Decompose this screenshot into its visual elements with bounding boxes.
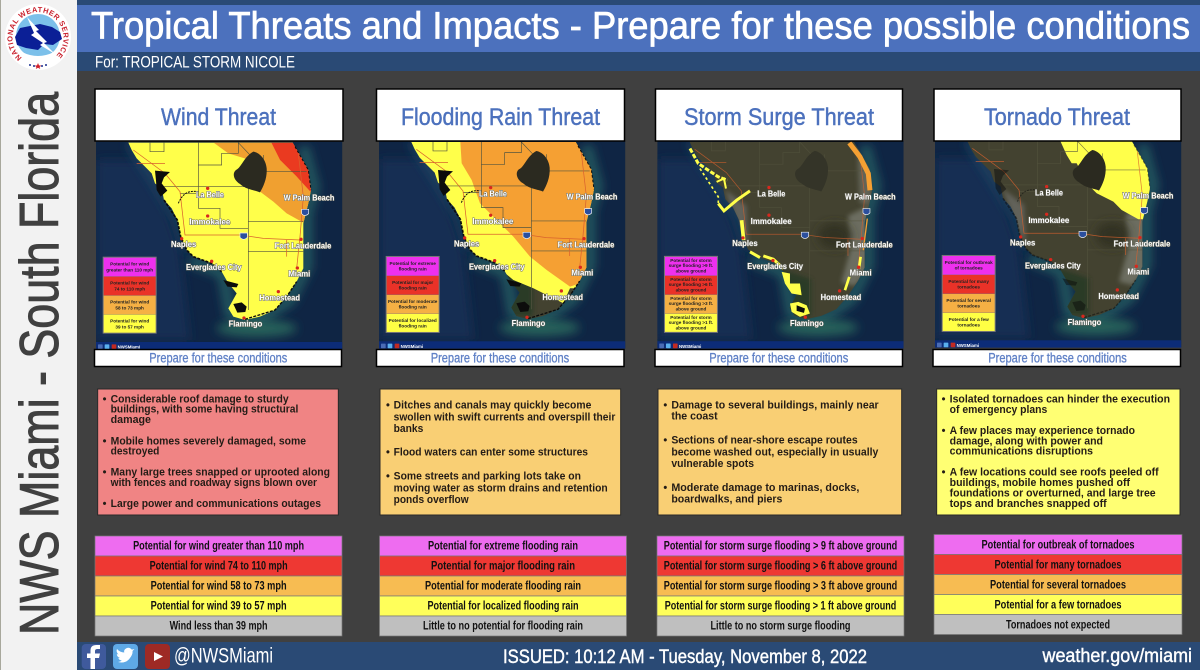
text block: flooding impacts: • <box>386 471 390 483</box>
map labels: Immokalee <box>472 216 514 226</box>
map legend: flooding rain <box>399 267 427 272</box>
map labels <box>454 189 617 328</box>
map legend: Potential for major <box>392 280 433 285</box>
map legend: surge flooding >9 ft. <box>669 263 713 268</box>
map labels: Fort Lauderdale <box>275 240 331 250</box>
map legend: Potential for a few <box>949 317 989 322</box>
legend: storm surge threat levels: Potential for storm surge flooding > 9 ft above ground <box>664 540 897 552</box>
map labels: Homestead <box>259 293 300 303</box>
map footer bar <box>657 341 904 349</box>
legend: storm surge threat levels: Little to no storm surge flooding <box>710 620 850 632</box>
legend: wind threat levels: Potential for wind 39 to 57 mph <box>151 600 287 612</box>
map labels: Homestead <box>821 292 861 302</box>
map legend: tornadoes <box>957 285 980 290</box>
subheading: flooding prepare <box>376 350 624 366</box>
text block: wind impacts: • <box>103 498 107 510</box>
legend: wind threat levels: Potential for wind 58 to 73 mph <box>151 580 287 592</box>
map legend: above ground <box>676 288 707 293</box>
map labels <box>171 189 334 329</box>
map legend: Potential for storm <box>670 258 712 263</box>
text block: wind impacts: Considerable roof damage to sturdy <box>111 394 289 406</box>
heading: Wind Threat <box>95 89 343 141</box>
text block: tornado impacts: A few locations could see roofs peeled off <box>950 467 1159 479</box>
legend: tornado threat levels: Potential for outbreak of tornadoes <box>982 540 1134 552</box>
legend: storm surge threat levels: Potential for storm surge flooding > 1 ft above ground <box>665 600 896 612</box>
map legend: of tornadoes <box>955 266 983 271</box>
text block: flooding impacts: • <box>386 447 390 459</box>
panel: tornado map <box>935 137 1181 348</box>
legend: flooding threat levels: Potential for extreme flooding rain <box>428 540 578 552</box>
text block: tornado impacts: communications disruptions <box>950 446 1093 458</box>
text block: wind impacts: with fences and roadway signs blown over <box>110 477 318 489</box>
heading: Wind Threat: Wind Threat <box>161 104 276 131</box>
text block: wind impacts: • <box>103 394 107 406</box>
legend: tornado threat levels: Tornadoes not expected <box>1006 620 1110 632</box>
legend: tornado threat levels: Potential for many tornadoes <box>994 560 1122 572</box>
legend: flooding threat levels: Potential for moderate flooding rain <box>425 580 581 592</box>
map labels: W Palm Beach <box>845 192 896 202</box>
website: weather.gov/miami <box>1042 646 1192 667</box>
map legend <box>942 255 996 332</box>
map labels: Flamingo <box>512 318 545 328</box>
map legend <box>103 257 157 334</box>
map footer bar <box>379 341 625 349</box>
text block: surge impacts: Moderate damage to marinas, docks, <box>671 482 859 494</box>
text block: tornado impacts: buildings, mobile homes pushed off <box>950 477 1130 489</box>
legend: flooding threat levels: Potential for localized flooding rain <box>428 600 578 612</box>
text block: surge impacts: Damage to several buildings, mainly near <box>671 399 879 411</box>
text block: tornado impacts: • <box>942 467 946 479</box>
map labels: Miami <box>1127 267 1149 277</box>
map legend: flooding rain <box>399 305 427 310</box>
map legend: surge flooding >3 ft. <box>669 301 713 306</box>
map footer bar: NWSMiami <box>118 345 140 350</box>
map legend: greater than 110 mph <box>106 267 153 272</box>
map labels: Everglades City <box>469 261 525 271</box>
text block: surge impacts: vulnerable spots <box>671 458 754 470</box>
map legend: above ground <box>676 326 707 331</box>
social handle: @NWSMiami <box>174 645 273 668</box>
text block: flooding impacts <box>380 389 621 515</box>
map legend: above ground <box>676 269 707 274</box>
subheading: flooding prepare: Prepare for these conditions <box>431 350 569 366</box>
map legend: Potential for wind <box>110 319 149 324</box>
legend: tornado threat levels: Potential for several tornadoes <box>990 580 1126 592</box>
legend: wind threat levels: Potential for wind 74 to 110 mph <box>150 560 288 572</box>
map labels: Miami <box>850 268 872 278</box>
text block: wind impacts: Mobile homes severely damaged, some <box>111 435 306 447</box>
subheading: surge prepare <box>655 350 902 366</box>
map labels: W Palm Beach <box>1123 191 1173 201</box>
map labels: Everglades City <box>1025 260 1081 270</box>
surge zones <box>690 143 870 317</box>
map labels: Homestead <box>542 292 583 302</box>
text block: wind impacts <box>98 389 338 515</box>
map labels <box>732 189 896 328</box>
map labels: Everglades City <box>747 261 803 271</box>
text block: flooding impacts: moving water as storm drains and retention <box>394 482 608 494</box>
panel: flooding rain map <box>379 137 625 349</box>
map labels: Immokalee <box>189 217 231 227</box>
map labels: Fort Lauderdale <box>558 240 614 250</box>
panel: wind map <box>96 140 342 350</box>
text block: tornado impacts: damage, along with power and <box>950 435 1103 447</box>
map legend: surge flooding >6 ft. <box>669 282 713 287</box>
text block: flooding impacts: swollen with swift currents and overspill their <box>394 411 616 423</box>
subheading: tornado prepare: Prepare for these conditions <box>988 350 1127 366</box>
map legend: flooding rain <box>399 286 427 291</box>
map legend: Potential for extreme <box>390 261 436 266</box>
icon: National Weather Service logo: NATIONAL WEATHER SERVICE <box>7 6 69 61</box>
text block: tornado impacts: • <box>942 394 946 406</box>
text block: tornado impacts: tops and branches snapped off <box>950 498 1107 510</box>
text block: surge impacts: boardwalks, and piers <box>671 494 782 506</box>
text block: wind impacts: Many large trees snapped or uprooted along <box>111 467 330 479</box>
text block: surge impacts <box>658 389 902 515</box>
map footer bar: NWSMiami <box>401 344 423 349</box>
map legend: 58 to 73 mph <box>115 305 144 310</box>
map legend: Potential for storm <box>670 296 712 301</box>
left sidebar <box>0 0 77 670</box>
legend: wind threat levels: Potential for wind greater than 110 mph <box>133 540 304 552</box>
heading: Tornado Threat: Tornado Threat <box>984 104 1130 131</box>
text block: flooding impacts: Ditches and canals may quickly become <box>394 400 591 412</box>
text block: surge impacts: the coast <box>671 411 718 423</box>
text block: tornado impacts: of emergency plans <box>950 404 1047 416</box>
text block: flooding impacts: Flood waters can enter some structures <box>394 447 588 459</box>
icon: twitter <box>113 644 138 669</box>
legend: storm surge threat levels <box>657 536 904 636</box>
text block: surge impacts: • <box>663 482 667 494</box>
text block: wind impacts: buildings, with some having structural <box>111 404 298 416</box>
subheading: wind prepare <box>94 350 342 366</box>
text block: flooding impacts: banks <box>394 423 423 435</box>
legend: storm surge threat levels: Potential for storm surge flooding > 6 ft above ground <box>664 560 897 572</box>
panel: storm surge map <box>657 141 904 349</box>
map legend <box>386 256 440 333</box>
text block: surge impacts: become washed out, especially in usually <box>671 446 879 458</box>
map legend <box>664 256 718 333</box>
map labels: W Palm Beach <box>284 192 334 202</box>
map labels: La Belle <box>757 189 785 199</box>
subheading: wind prepare: Prepare for these conditions <box>149 350 287 366</box>
map legend: Potential for wind <box>110 262 149 267</box>
text block: wind impacts: damage <box>111 414 151 426</box>
map labels: Immokalee <box>751 216 792 226</box>
map footer bar <box>96 342 342 350</box>
heading: Flooding Rain Threat <box>376 89 624 141</box>
map legend: surge flooding >1 ft. <box>669 320 713 325</box>
subheading: surge prepare: Prepare for these conditions <box>709 350 848 366</box>
map legend: 39 to 57 mph <box>115 324 144 329</box>
header banner <box>77 0 1200 72</box>
heading: Flooding Rain Threat: Flooding Rain Threat <box>401 104 600 131</box>
legend: flooding threat levels <box>380 536 626 636</box>
text block: wind impacts: • <box>103 435 107 447</box>
text block: tornado impacts: foundations or overturned, and large tree <box>950 488 1156 500</box>
heading: Storm Surge Threat: Storm Surge Threat <box>684 104 874 131</box>
text block: tornado impacts: A few places may experience tornado <box>950 425 1135 437</box>
footer bar <box>77 642 1200 670</box>
text block: flooding impacts: • <box>386 400 390 412</box>
map legend: Potential for many <box>948 279 989 284</box>
text block: wind impacts: Large power and communications outages <box>111 498 321 510</box>
text block: surge impacts: • <box>663 399 667 411</box>
map labels: Naples <box>732 238 758 248</box>
map footer bar: NWSMiami <box>679 344 701 349</box>
map labels: Flamingo <box>229 319 262 329</box>
map labels: Immokalee <box>1028 215 1070 225</box>
subheading: tornado prepare <box>933 350 1180 366</box>
map labels: Homestead <box>1098 291 1139 301</box>
text block: wind impacts: • <box>103 467 107 479</box>
legend: flooding threat levels: Potential for major flooding rain <box>431 560 575 572</box>
text block: tornado impacts <box>937 389 1180 515</box>
text block: tornado impacts: • <box>942 425 946 437</box>
text block: flooding impacts: Some streets and parking lots take on <box>394 471 581 483</box>
map labels: Fort Lauderdale <box>1114 239 1170 249</box>
map legend: above ground <box>676 307 707 312</box>
map labels: Naples <box>171 239 196 249</box>
map legend: Potential for several <box>946 298 991 303</box>
map labels: Everglades City <box>186 262 242 272</box>
map labels: La Belle <box>479 189 507 199</box>
map labels: La Belle <box>196 189 224 199</box>
heading: Tornado Threat <box>934 89 1181 141</box>
text block: flooding impacts: ponds overflow <box>394 494 469 506</box>
map legend: Potential for wind <box>110 300 149 305</box>
text block: wind impacts: destroyed <box>111 446 159 458</box>
map legend: Potential for moderate <box>388 299 438 304</box>
map labels: Naples <box>454 238 479 248</box>
text block: tornado impacts: Isolated tornadoes can hinder the execution <box>950 394 1170 406</box>
map legend: tornadoes <box>957 304 980 309</box>
map legend: Potential for storm <box>670 315 712 320</box>
heading: Storm Surge Threat <box>656 89 902 141</box>
text block: surge impacts: • <box>663 435 667 447</box>
issued date: ISSUED: 10:12 AM - Tuesday, November 8, 2022 <box>503 647 867 668</box>
text block: surge impacts: Sections of near-shore escape routes <box>671 435 858 447</box>
legend: tornado threat levels: Potential for a few tornadoes <box>994 600 1122 612</box>
map labels <box>1010 188 1173 327</box>
map legend: tornadoes <box>957 323 980 328</box>
icon: youtube <box>145 644 170 669</box>
map legend: flooding rain <box>399 324 427 329</box>
map legend: Potential for storm <box>670 277 712 282</box>
map labels: Flamingo <box>790 318 824 328</box>
map legend: Potential for localized <box>389 318 437 323</box>
map labels: Miami <box>571 268 593 278</box>
legend: storm surge threat levels: Potential for storm surge flooding > 3 ft above ground <box>664 580 897 592</box>
map labels: Flamingo <box>1068 317 1101 327</box>
legend: wind threat levels: Wind less than 39 mph <box>170 620 268 632</box>
map labels: W Palm Beach <box>567 192 617 202</box>
map labels: La Belle <box>1035 188 1063 198</box>
map legend: Potential for outbreak <box>945 260 993 265</box>
subtitle: For: TROPICAL STORM NICOLE <box>95 52 295 72</box>
icon: facebook <box>82 644 106 669</box>
legend: wind threat levels <box>95 536 342 636</box>
map footer bar <box>935 340 1181 348</box>
map labels: Miami <box>288 268 310 278</box>
map footer bar: NWSMiami <box>957 343 979 348</box>
map labels: Fort Lauderdale <box>836 240 893 250</box>
map legend: Potential for wind <box>110 281 149 286</box>
legend: tornado threat levels <box>934 534 1182 634</box>
map legend: 74 to 110 mph <box>114 286 145 291</box>
map labels: Naples <box>1010 237 1035 247</box>
legend: flooding threat levels: Little to no potential for flooding rain <box>423 620 583 632</box>
